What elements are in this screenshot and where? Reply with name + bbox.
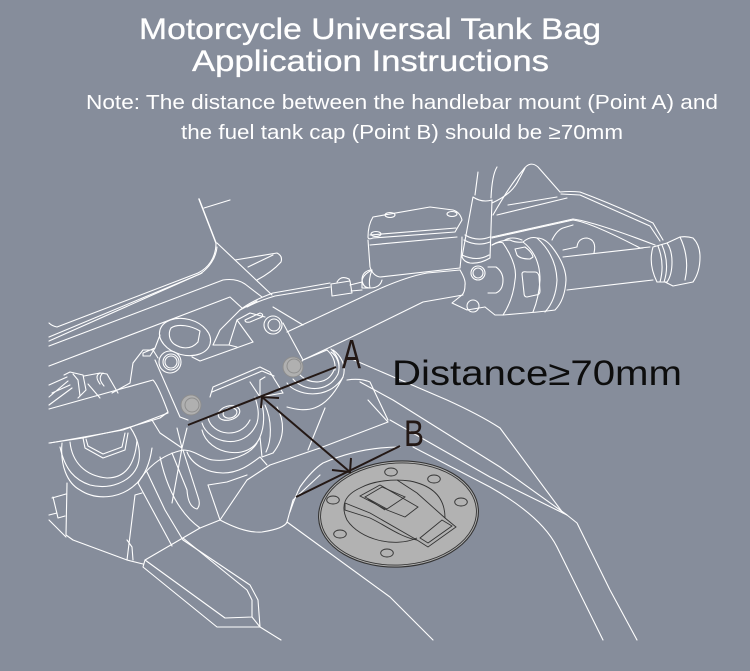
point labels — [342, 331, 424, 454]
title: Motorcycle Universal Tank Bag — [139, 13, 601, 46]
brake cable — [240, 270, 372, 310]
left fork tube — [49, 413, 168, 564]
top clamp — [112, 301, 327, 420]
fuel tank cap — [316, 457, 481, 571]
blade fairing — [143, 538, 281, 640]
title — [139, 13, 601, 78]
distance label: Distance≥70mm — [392, 354, 682, 393]
measurement lines and arrow — [188, 367, 400, 497]
hand guard — [492, 164, 663, 253]
handlebar — [49, 270, 463, 443]
left grip fragment — [49, 372, 118, 405]
tank lines — [290, 357, 637, 640]
note text — [86, 92, 718, 144]
under-clamp and ribs — [138, 420, 433, 640]
right switch and grip — [452, 237, 700, 315]
title: Application Instructions — [192, 45, 549, 78]
note text: Note: The distance between the handlebar mount (Point A) and — [86, 92, 718, 114]
bolts at handlebar mount — [181, 357, 303, 415]
brake reservoir — [362, 207, 462, 288]
point labels: A — [342, 331, 361, 377]
right fork top — [287, 349, 344, 450]
middle fork — [202, 397, 283, 465]
windscreen and fairing — [49, 199, 303, 366]
point labels: B — [404, 413, 424, 454]
lower triple clamp — [210, 367, 283, 397]
note text: the fuel tank cap (Point B) should be ≥70mm — [181, 122, 623, 144]
cable boot — [462, 167, 497, 263]
line drawing: motorcycle cockpit — [49, 164, 700, 640]
